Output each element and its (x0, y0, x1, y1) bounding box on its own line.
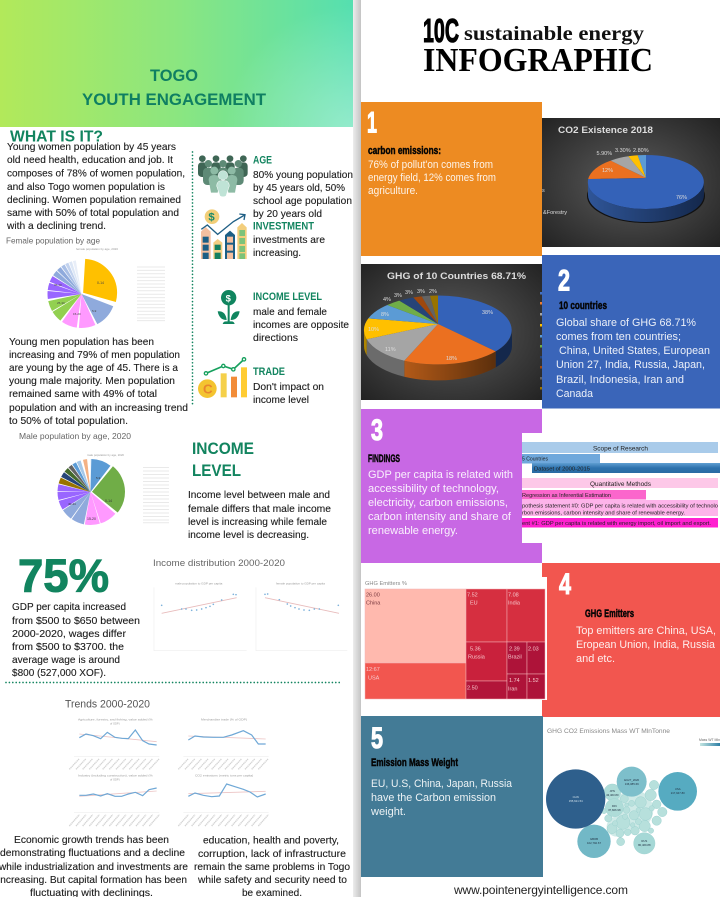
scatter chart: male population to GDP (154, 581, 247, 651)
treemap: GHG emitters percent: 1.74 (509, 678, 520, 684)
text block: young women: composes of 78% of women population, (7, 168, 185, 180)
panel: findings: accessibility of technology, (368, 483, 499, 495)
chart: GHG of 10 countries 3D pie: 18% (446, 356, 457, 362)
text block: young men: population and with an increasing trend (9, 402, 188, 414)
panel: 10 countries: Union 27, India, Russia, Japan, (556, 359, 705, 371)
diagram: scope of research: Scope of Research (593, 446, 648, 452)
text block: ongoing problems: while safety and security need to (197, 874, 347, 886)
title: sustainable energy infographic: INFOGRAPHIC (423, 42, 653, 79)
panel: emission mass weight: EU, U.S, China, Japan, Russia (371, 778, 513, 790)
icon: people (198, 155, 248, 197)
panel: emission mass weight: Emission Mass Weight (371, 757, 458, 769)
header banner: Togo youth engagement: TOGO (150, 67, 198, 85)
panel: 10 countries: Brazil, Indonesia, Iran and (556, 374, 684, 386)
text block: GDP per capita: from $500 to $650 between (12, 615, 140, 627)
treemap: GHG emitters percent: China (366, 600, 381, 606)
panel: emission mass weight: 5 (371, 722, 383, 755)
text block: young women: old need health, education and job. It (7, 154, 173, 166)
text block: economic growth trends: demonstrating fluctuations and a decline (0, 847, 185, 859)
diagram: scope of research: Regression as Inferential Estimation (522, 493, 611, 499)
diagram: scope of research: Dataset of 2000-2015 (534, 466, 590, 472)
pie chart: male population by age: male population by age, 2020 (87, 454, 125, 457)
text block: investment: increasing. (253, 247, 301, 259)
bubble chart: GHG CO2 emissions: 80,469.88 (638, 843, 651, 847)
text block: age (253, 154, 353, 220)
text block: ongoing problems: education, health and poverty, (203, 834, 339, 846)
treemap: GHG emitters percent: Iran (508, 686, 517, 692)
chart: GHG of 10 countries 3D pie: 10% (368, 327, 379, 333)
icon: money plant: $ (226, 293, 232, 303)
text block: GDP per capita: average wage is around (12, 654, 120, 666)
line chart: industry (69, 773, 159, 826)
heading: what is it: WHAT IS IT? (10, 128, 103, 146)
diagram: scope of research: 5 Countries (522, 456, 548, 462)
chart: GHG of 10 countries 3D pie: 3% (417, 289, 425, 295)
scatter chart: female population to GDP (256, 581, 347, 651)
bubble chart: GHG CO2 emissions: CHN (573, 795, 579, 799)
bubble chart: GHG CO2 emissions: GHG CO2 Emissions Mass WT MlnTonne (547, 728, 670, 735)
chart: CO2 existence 3D pie: 5.90% (596, 151, 612, 157)
chart: CO2 existence 3D pie: 76% (676, 195, 687, 201)
text block: investment (253, 220, 325, 259)
chart: CO2 existence 3D pie: CO2 Existence 2018 (558, 125, 653, 135)
panel: 10 countries: comes from ten countries; (556, 331, 681, 343)
line chart: CO2 emissions (178, 773, 269, 826)
diagram: scope of research: rbon emissions, carbon intensity and share of renewable energy. (522, 510, 685, 516)
bubble chart: GHG CO2 emissions: 136,085.69 (625, 782, 639, 786)
text block: GDP per capita (12, 601, 140, 679)
pie chart: male population by age: 0-14 (105, 499, 112, 503)
text block: ongoing problems (194, 834, 350, 897)
text block: trade: TRADE (253, 366, 285, 378)
diagram: scope of research: ent #1: GDP per capita is related with energy import, oil import and export. (522, 521, 711, 527)
text block: income level description (188, 489, 331, 541)
panel: carbon emissions: energy field, 12% comes from (368, 172, 496, 184)
treemap: GHG emitters percent: GHG Emitters % (365, 581, 407, 587)
text block: young men: are young by the age of 45. There is a (9, 362, 178, 374)
text block: investment: INVESTMENT (253, 220, 314, 232)
panel: carbon emissions: 1 (367, 106, 377, 140)
text block: young men: increasing and 79% of men population (9, 349, 180, 361)
pie chart: female population by age: 0-14 (97, 281, 104, 285)
bubble chart: GHG CO2 emissions: GBOB (590, 837, 598, 841)
chart: GHG of 10 countries 3D pie: 38% (482, 310, 493, 316)
text block: young women: declining. Women population remained (7, 194, 181, 206)
text block: trade (253, 366, 324, 406)
chart: GHG of 10 countries 3D pie: GHG of 10 Countries 68.71% (387, 271, 526, 281)
bubble chart: GHG CO2 emissions: IDN (612, 804, 617, 808)
panel: GHG emitters (542, 563, 720, 717)
panel: emission mass weight: weight. (370, 806, 406, 818)
panel: emission mass weight (361, 716, 543, 877)
text block: GDP per capita: $800 (527,000 XOF). (12, 667, 106, 679)
text block: ongoing problems: corruption, lack of infrastructure (198, 848, 346, 860)
panel: findings: electricity, carbon emissions, (368, 497, 508, 509)
text block: young men: young male majority. Men population (9, 375, 175, 387)
text block: income level description: income level is decreasing. (188, 529, 309, 541)
pie chart: female population by age: 25-30 (57, 301, 65, 305)
line chart: agriculture: Agriculture, forestry, and fishing, value added (% (78, 717, 153, 721)
panel: carbon emissions: agriculture. (368, 185, 418, 197)
pie chart: male population by age: 5-9 (96, 476, 101, 480)
pie chart: female population by age: 35-40 (54, 283, 62, 287)
treemap: GHG emitters percent: 7.52 (467, 592, 478, 598)
heading: income level: LEVEL (192, 461, 241, 480)
chart title: income distribution: Income distribution 2000-2020 (153, 558, 285, 569)
heading: income level: INCOME (192, 439, 254, 458)
scatter chart: male population to GDP: male population to GDP per capita (175, 581, 223, 585)
text block: GDP per capita: GDP per capita increased (12, 601, 126, 613)
panel: GHG emitters: Eropean Union, India, Russia (576, 639, 716, 651)
text block: economic growth trends: Economic growth trends has been (14, 834, 169, 846)
bubble chart: GHG CO2 emissions: EU27_2020 (624, 778, 640, 782)
chart title: male population: Male population by age, 2020 (19, 432, 132, 441)
panel: carbon emissions (361, 102, 542, 256)
chart: GHG of 10 countries 3D pie: 4% (383, 297, 391, 303)
pie chart: male population by age: 15-20 (87, 517, 96, 521)
panel: carbon emissions: 76% of pollut'on comes from (368, 159, 493, 171)
line chart: CO2 emissions: CO2 emissions (metric tons per capita) (195, 773, 253, 777)
icon: money plant (218, 290, 240, 324)
bubble chart: GHG CO2 emissions: RUS (641, 839, 647, 843)
pie chart: female population by age: 5-9 (92, 309, 97, 313)
chart: GHG of 10 countries 3D pie (361, 264, 542, 400)
treemap: GHG emitters percent: 26.00 (366, 592, 380, 598)
pie chart: female population by age: 15-20 (73, 312, 81, 316)
panel: carbon emissions: carbon emissions: (368, 145, 441, 157)
icon: investment (201, 209, 247, 259)
panel: GHG emitters: 4 (559, 568, 571, 601)
icon: investment: $ (208, 212, 215, 224)
bubble chart: GHG CO2 emissions: 43,463.80 (606, 793, 619, 797)
text block: income level: male and female (253, 306, 327, 318)
text block: income level description: female differs that male income (188, 503, 331, 515)
treemap: GHG emitters percent: 2.50 (467, 686, 478, 692)
panel: GHG emitters: Top emitters are China, USA, (576, 625, 716, 637)
treemap: GHG emitters percent: 2.39 (509, 646, 520, 652)
panel: findings (361, 409, 542, 563)
line chart: merchandise trade (178, 717, 269, 769)
panel: findings: carbon intensity and share of (368, 511, 512, 523)
pie chart: female population by age: female population by age, 2020 (76, 248, 119, 251)
text block: income level: incomes are opposite (253, 319, 349, 331)
bubble chart: GHG CO2 emissions: 102,792.67 (587, 841, 601, 845)
text block: income level (253, 291, 349, 344)
title: sustainable energy infographic: 10C (423, 12, 459, 49)
panel: 10 countries (542, 255, 720, 408)
treemap: GHG emitters percent: 7.08 (508, 592, 519, 598)
chart: CO2 existence 3D pie (542, 118, 720, 247)
text block: young women: Young women population by 45 years (7, 141, 176, 153)
text block: income level: INCOME LEVEL (253, 291, 322, 303)
text block: age: by 20 years old (253, 208, 322, 220)
panel: GHG emitters: and etc. (576, 653, 615, 665)
chart title: female population: Female population by age (6, 236, 101, 246)
chart: GHG of 10 countries 3D pie: 11% (385, 347, 396, 353)
diagram: scope of research: Quantitative Methods (590, 481, 652, 488)
pie chart: female population by age (54, 248, 165, 321)
text block: GDP per capita: from $500 to $3700. the (12, 641, 124, 653)
panel: emission mass weight: have the Carbon emission (371, 792, 496, 804)
panel: 10 countries: Canada (556, 388, 594, 400)
bubble chart: GHG CO2 emissions: 155,621.54 (569, 799, 583, 803)
panel: findings: FINDINGS (368, 453, 400, 465)
text block: young women (6, 141, 185, 232)
pie chart: male population by age: 40-44 (68, 502, 76, 506)
treemap: GHG emitters percent: 5.36 (470, 646, 481, 652)
bubble chart: GHG CO2 emissions: 37,826.98 (608, 808, 621, 812)
bubble chart: GHG CO2 emissions (546, 728, 720, 858)
chart: GHG of 10 countries 3D pie: 8% (381, 312, 389, 318)
page gutter (353, 0, 361, 897)
text block: economic growth trends: increasing. But capital formation has been (0, 874, 187, 886)
treemap: GHG emitters percent: USA (368, 676, 380, 682)
big number: 75%: 75% (18, 550, 109, 602)
treemap: GHG emitters percent: 1.52 (528, 678, 539, 684)
text block: trade: income level (253, 394, 309, 406)
treemap: GHG emitters percent: Brazil (508, 654, 522, 660)
treemap: GHG emitters percent: 2.03 (528, 646, 539, 652)
text block: young men: remained same with 49% of total (9, 388, 157, 400)
pie chart: male population by age (68, 454, 169, 523)
icon: trade (198, 358, 247, 398)
heading: income level (192, 439, 254, 480)
panel: GHG emitters: GHG Emitters (585, 608, 634, 620)
text block: ongoing problems: remain the same problems in Togo (194, 861, 350, 873)
text block: trade: Don't impact on (253, 381, 324, 393)
treemap: GHG emitters percent: India (508, 600, 521, 606)
panel: 10 countries: China, United States, European (559, 345, 710, 357)
footer: website: www.pointenergyintelligence.com (453, 883, 628, 897)
text block: young men: Young men population has been (9, 336, 154, 348)
chart: GHG of 10 countries 3D pie: 3% (405, 290, 413, 296)
treemap: GHG emitters percent: 12:67 (366, 667, 380, 673)
chart: CO2 existence 3D pie: 3.30% (615, 148, 631, 154)
bubble chart: GHG CO2 emissions: Mass WT Mln (699, 738, 720, 742)
chart title: trends: Trends 2000-2020 (65, 698, 150, 710)
treemap: GHG emitters percent: Russia (468, 654, 486, 660)
text block: young men (9, 336, 188, 427)
text block: age: 80% young population (253, 169, 353, 181)
text block: young women: and also Togo women population is (7, 181, 165, 193)
text block: GDP per capita: 2000-2020, wages differ (12, 628, 126, 640)
text block: income level description: Income level between male and (188, 489, 330, 501)
bubble chart: GHG CO2 emissions: JPN (610, 789, 615, 793)
text block: young women: with a declining trend. (6, 220, 106, 232)
text block: investment: investments are (253, 234, 325, 246)
line chart: agriculture (69, 717, 159, 769)
text block: age: AGE (253, 154, 272, 166)
treemap: GHG emitters percent (361, 577, 547, 700)
chart: CO2 existence 3D pie: s (542, 188, 545, 194)
panel: findings: renewable energy. (368, 525, 458, 537)
bubble chart: GHG CO2 emissions: 217,947.80 (671, 791, 685, 795)
header banner: Togo youth engagement: YOUTH ENGAGEMENT (82, 91, 266, 109)
line chart: merchandise trade: Merchandise trade (% of GDP) (201, 717, 247, 721)
text block: economic growth trends (0, 834, 188, 897)
panel: findings: GDP per capita is related with (368, 469, 513, 481)
text block: young men: to 50% of total population. (9, 415, 128, 427)
panel: 10 countries: 10 countries (559, 300, 607, 312)
treemap: GHG emitters percent: EU (470, 600, 478, 606)
title: sustainable energy infographic: sustainable energy (464, 23, 644, 45)
icon: trade: C (203, 382, 213, 397)
line chart: agriculture: of GDP) (110, 721, 120, 725)
chart: CO2 existence 3D pie: &Forestry (543, 210, 567, 216)
text block: income level description: level is increasing while female (188, 516, 327, 528)
title: sustainable energy infographic (423, 12, 653, 79)
chart: CO2 existence 3D pie: 12% (602, 168, 613, 174)
line chart: industry: Industry (including construction), value added (% (78, 773, 153, 777)
text block: economic growth trends: while industrialization and investments are (0, 861, 188, 873)
panel: 10 countries: 2 (558, 264, 570, 298)
chart: GHG of 10 countries 3D pie: 2% (429, 289, 437, 295)
scatter chart: female population to GDP: female population to GDP per capita (276, 581, 326, 585)
panel: findings: 3 (371, 414, 383, 447)
bubble chart: GHG CO2 emissions: USA (675, 787, 681, 791)
header banner: Togo youth engagement (0, 0, 353, 127)
diagram: scope of research (522, 433, 720, 543)
line chart: industry: of GDP) (110, 777, 120, 781)
text block: young women: same with 50% of total population and (7, 207, 179, 219)
chart: GHG of 10 countries 3D pie: 3% (394, 293, 402, 299)
text block: age: by 45 years old, 50% (253, 182, 345, 194)
panel: 10 countries: Global share of GHG 68.71% (556, 317, 696, 329)
chart: CO2 existence 3D pie: 2.80% (633, 148, 649, 154)
diagram: scope of research: pothesis statement #0: GDP per capita is related with accessibility of technolo (522, 504, 718, 510)
text block: income level: directions (253, 332, 298, 344)
text block: age: school age population (253, 195, 352, 207)
